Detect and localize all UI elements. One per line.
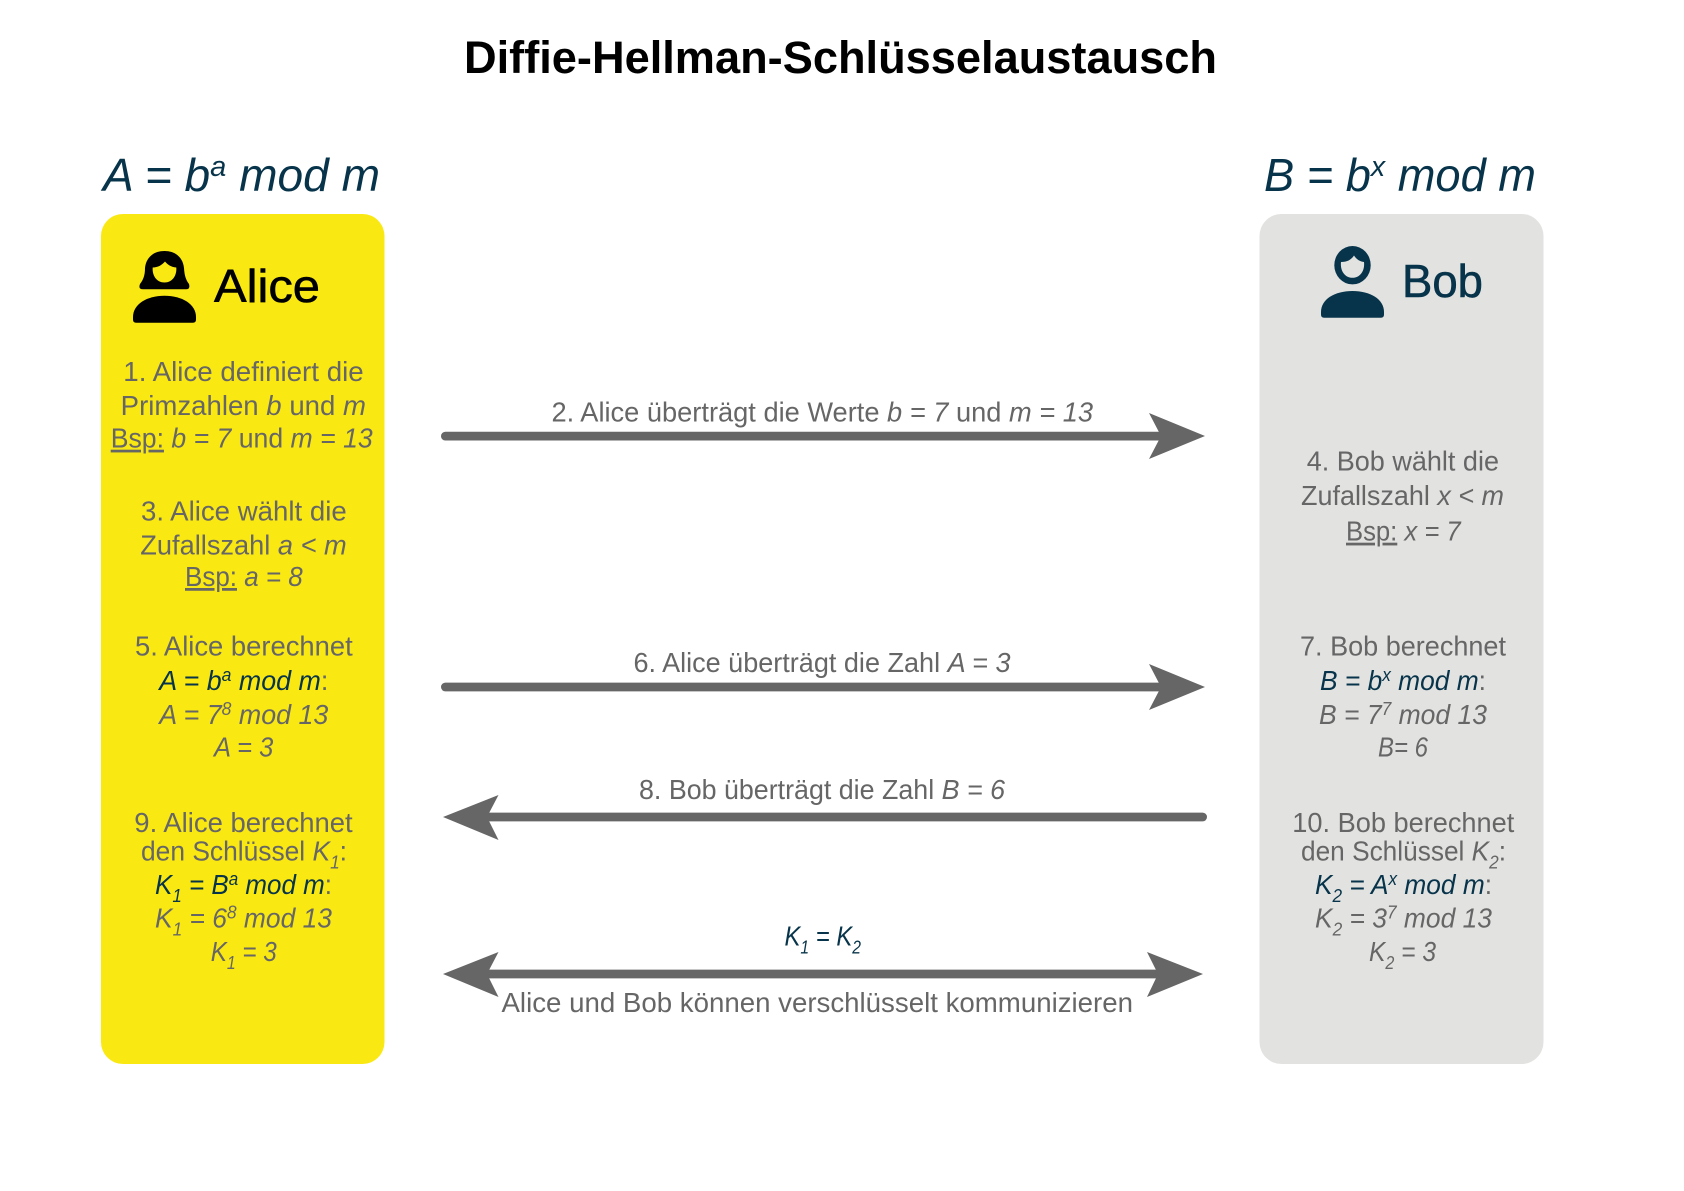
- formula: Bob: mod m: [1385, 149, 1536, 201]
- step 10: = 3: [1342, 903, 1388, 934]
- step 9: = 6: [182, 903, 228, 934]
- step 9: K: [155, 869, 325, 906]
- step 1: [111, 356, 373, 454]
- formula: Alice: mod m: [226, 149, 380, 201]
- panel: Bob: [1260, 214, 1544, 1064]
- step 4: [1301, 446, 1504, 547]
- step 3: Zufallszahl a < m: [140, 529, 347, 560]
- step 9: mod m: [238, 869, 325, 900]
- formula: Alice: A = b: [103, 149, 210, 201]
- step 10: = 3: [1394, 936, 1437, 967]
- step 5: 8: [222, 699, 231, 719]
- step 9: :: [340, 836, 347, 867]
- step 5: a: [222, 665, 231, 685]
- step 10: [1292, 807, 1515, 973]
- step 3: Bsp: a = 8: [185, 561, 303, 592]
- step 9: K: [155, 903, 173, 934]
- key equality label: 1: [800, 938, 809, 958]
- arrow: step 8, Bob to Alice: [443, 795, 1207, 840]
- step 5: mod 13: [231, 699, 329, 730]
- panel background: Bob: [1260, 214, 1544, 1064]
- step 10: mod 13: [1397, 903, 1493, 934]
- step 7: [1300, 631, 1506, 763]
- step 10: :: [1485, 869, 1492, 900]
- step 5: A = 7: [159, 699, 223, 730]
- panel background: Alice: [101, 214, 384, 1064]
- step 10: den Schlüssel K: [1301, 836, 1490, 867]
- formula: Bob: B = b: [1264, 149, 1373, 201]
- step 3: [140, 496, 347, 592]
- step 5: mod m: [231, 665, 321, 696]
- step 4: Zufallszahl x < m: [1301, 480, 1504, 511]
- step 1: Primzahlen b und m: [121, 390, 366, 421]
- step 7: 7. Bob berechnet: [1300, 631, 1506, 662]
- step 1: 1. Alice definiert die: [123, 356, 364, 387]
- step 9: 1: [227, 953, 236, 973]
- step 2 label: 2. Alice überträgt die Werte b = 7 und m = 13: [552, 396, 1094, 428]
- step 5: :: [321, 665, 328, 696]
- icon: Alice person: [133, 251, 196, 323]
- step 10: 2: [1332, 886, 1342, 906]
- step 3: 3. Alice wählt die: [141, 496, 347, 527]
- title: Diffie-Hellman-Schlüsselaustausch: [464, 32, 1217, 83]
- step 8 label: 8. Bob überträgt die Zahl B = 6: [639, 774, 1006, 805]
- step 4: Bsp: x = 7: [1346, 516, 1462, 547]
- step 9: K: [211, 936, 229, 967]
- step 9: 1: [172, 886, 182, 906]
- step 9: a: [229, 869, 238, 889]
- step 7: mod m: [1391, 665, 1479, 696]
- arrow: step 6, Alice to Bob: [441, 664, 1205, 710]
- step 9: 1: [173, 920, 182, 940]
- key equality label: = K: [809, 921, 854, 952]
- step 7: B= 6: [1378, 732, 1429, 763]
- step 7: x: [1381, 665, 1392, 685]
- key equality label: 2: [851, 938, 861, 958]
- step 7: 7: [1382, 699, 1392, 719]
- step 10: 2: [1384, 953, 1394, 973]
- key equality label: K: [784, 921, 803, 952]
- step 5: 5. Alice berechnet: [135, 631, 353, 662]
- step 9: 1: [330, 853, 340, 873]
- step 9: [134, 807, 353, 973]
- step 9: mod 13: [237, 903, 333, 934]
- encrypted communication label: Alice und Bob können verschlüsselt kommunizieren: [502, 987, 1133, 1018]
- step 9: den Schlüssel K: [141, 836, 331, 867]
- step 5: A = b: [157, 665, 321, 696]
- step 10: K: [1315, 869, 1485, 906]
- step 9: 8: [227, 903, 237, 923]
- step 7: mod 13: [1391, 699, 1488, 730]
- step 5: [135, 631, 353, 763]
- step 7: B = b: [1320, 665, 1479, 696]
- step 9: = B: [182, 869, 229, 900]
- step 6 label: 6. Alice überträgt die Zahl A = 3: [634, 647, 1011, 678]
- arrow: two-way encrypted channel: [443, 952, 1203, 997]
- step 5: A = 3: [212, 732, 274, 763]
- step 7: :: [1479, 665, 1486, 696]
- step 9: = 3: [236, 936, 277, 967]
- step 10: mod m: [1397, 869, 1485, 900]
- step 7: B = 7: [1319, 699, 1384, 730]
- heading: Bob: Bob: [1402, 255, 1483, 307]
- step 9: 9. Alice berechnet: [134, 807, 353, 838]
- step 4: 4. Bob wählt die: [1307, 446, 1499, 477]
- step 10: K: [1369, 936, 1387, 967]
- panel: Alice: [101, 214, 384, 1064]
- step 1: Bsp: b = 7 und m = 13: [111, 423, 373, 454]
- step 10: :: [1499, 836, 1506, 867]
- heading: Alice: Alice: [214, 260, 320, 312]
- step 10: K: [1315, 903, 1333, 934]
- step 10: 2: [1488, 853, 1499, 873]
- step 10: 2: [1332, 920, 1342, 940]
- step 10: 10. Bob berechnet: [1292, 807, 1515, 838]
- step 10: 7: [1387, 903, 1398, 923]
- step 10: = A: [1342, 869, 1389, 900]
- formula: Bob: x: [1369, 151, 1387, 183]
- formula: Alice: a: [210, 151, 226, 183]
- step 9: :: [325, 869, 332, 900]
- step 10: x: [1388, 869, 1398, 889]
- icon: Bob person: [1321, 246, 1384, 318]
- arrow: step 2, Alice to Bob: [441, 413, 1205, 459]
